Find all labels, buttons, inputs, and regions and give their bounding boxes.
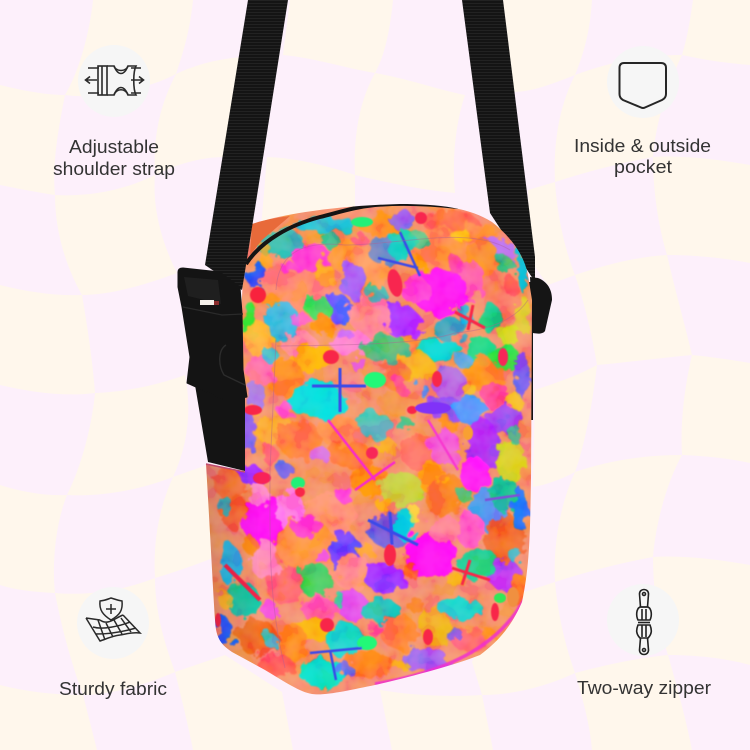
label: Two-way zipper xyxy=(577,678,711,698)
feature: two-way zipper xyxy=(577,584,711,698)
top gusset xyxy=(250,216,290,255)
icon: shielded fabric xyxy=(86,598,140,641)
feature: inside and outside pocket xyxy=(574,46,711,177)
label: Inside & outside xyxy=(574,136,711,156)
label: Sturdy fabric xyxy=(59,679,167,699)
icon badge xyxy=(607,46,679,118)
icon badge xyxy=(607,584,679,656)
feature: adjustable shoulder strap xyxy=(53,45,175,179)
icon: buckle with arrows xyxy=(86,66,144,95)
slip pocket rim xyxy=(206,464,245,472)
lower strap into slip pocket xyxy=(195,385,245,471)
label xyxy=(53,137,175,179)
pocket seam xyxy=(270,237,528,668)
icon badge xyxy=(77,587,149,659)
icon badge xyxy=(78,45,150,117)
label: shoulder strap xyxy=(53,159,175,179)
label xyxy=(574,136,711,177)
right shoulder strap xyxy=(462,0,552,420)
icon: pocket xyxy=(620,63,666,108)
painted fabric pattern xyxy=(200,200,540,700)
feature: sturdy fabric xyxy=(59,587,167,699)
zipper xyxy=(246,204,458,264)
small brush marks xyxy=(219,228,522,676)
label: Adjustable xyxy=(69,137,159,157)
left shoulder strap xyxy=(195,0,288,471)
side panel shading xyxy=(206,465,246,659)
crisp fabric accents xyxy=(215,212,524,684)
icon: zipper pulls xyxy=(637,590,651,654)
colour mottling over the print xyxy=(200,200,540,700)
bag body xyxy=(200,200,540,700)
label: pocket xyxy=(614,157,672,177)
side release buckle xyxy=(178,268,247,401)
